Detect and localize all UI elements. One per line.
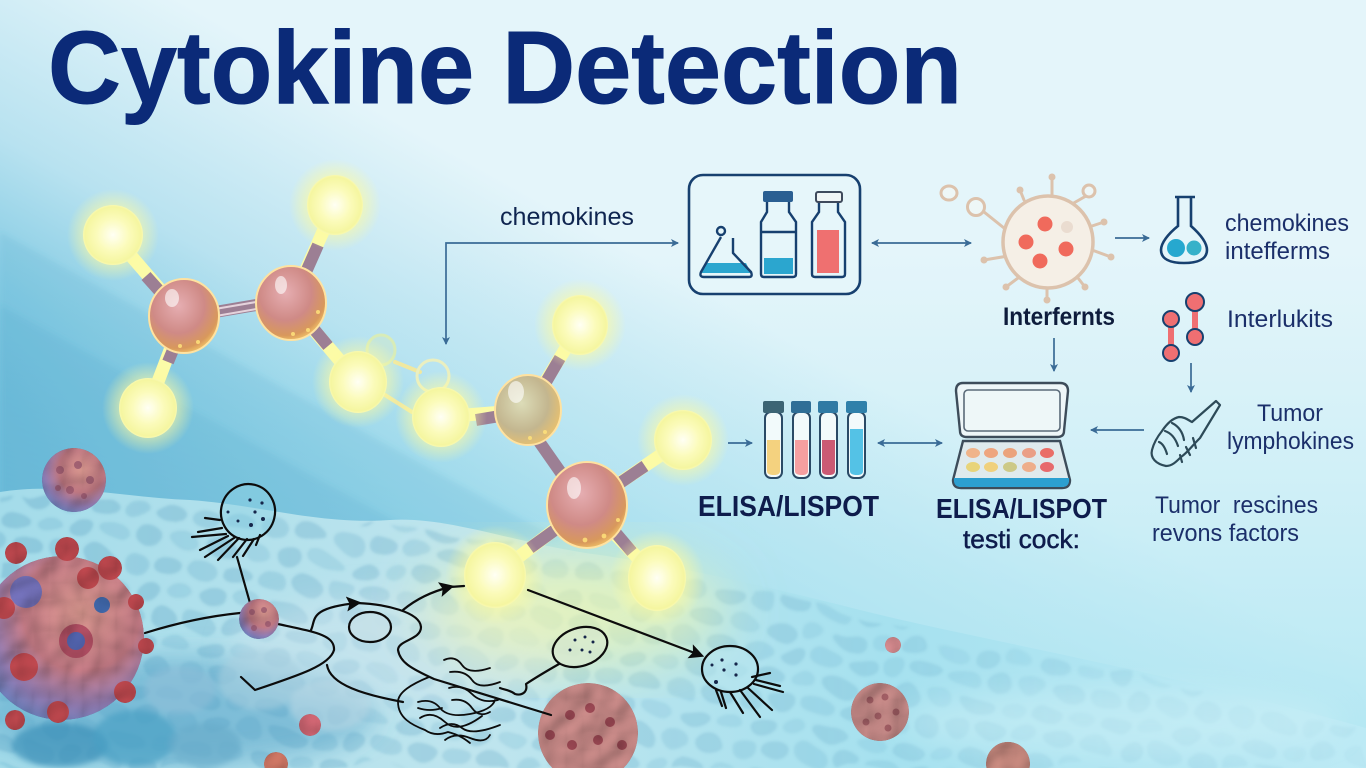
tiny floating particles [264,637,1030,768]
squiggle lines: fibroblast [398,658,500,743]
virus: large, left [0,537,154,730]
arrow: box to interferon cell [872,242,971,244]
label: Tumor lymphokines: Tumor [1257,400,1323,427]
label: ELISA/LISPOT test kit: testi cock: [963,524,1080,554]
black arrows: signalling network [145,557,700,715]
icon: flask [700,227,752,277]
icon: test kit case [953,383,1070,488]
terrain: cell tissue surface [0,489,1366,768]
arrow: tubes to kit [878,442,942,444]
icon: tall bottle [761,191,796,277]
label: chemokines interferms: chemokines [1225,210,1349,237]
label: chemokines with elbow arrow [446,203,678,344]
label: ELISA/LISPOT test kit [936,493,1107,554]
label: Interferents: Interfernts [1003,303,1115,331]
icon: red bottle [812,192,845,277]
pathway: hand-drawn cells and arrows [145,478,783,743]
arrow: lymph icon to kit [1091,429,1144,431]
arrow: dumbbell down to lymph icon [1190,363,1192,392]
icon: round flask [1161,197,1207,263]
panel: lab glassware box [689,175,860,294]
icon: test tubes [763,401,867,478]
label: chemokines interferms: intefferms [1225,238,1330,265]
icon: lymph gland sketch [1152,401,1220,466]
label: Interlukits: Interlukits [1227,306,1333,333]
icon: interferon cell [941,174,1114,304]
label: Tumor lymphokines [1227,400,1354,455]
label: Tumor rescines revons factors [1152,492,1318,547]
arrow: molecule to tubes [728,442,752,444]
sketch cell: bottom right [702,646,783,717]
label: chemokines with elbow arrow: chemokines [500,203,634,231]
molecule: glowing cytokine chain [67,159,729,665]
virus: small upper left [42,448,106,512]
node cell: right oval [500,620,613,695]
label: Tumor rescines revons factors: revons factors [1152,520,1299,547]
virus: bottom right [851,683,909,741]
label: ELISA/LISPOT test kit: ELISA/LISPOT [936,493,1107,524]
label: Tumor lymphokines: lymphokines [1227,428,1354,455]
sketch cell: top [192,478,281,560]
virus: pathway node [239,599,279,639]
label: ELISA/LISPOT left: ELISA/LISPOT [698,491,879,523]
virus: bottom center [538,683,638,768]
icon: red dumbbell molecule [1163,293,1204,361]
label: Tumor rescines revons factors: Tumor rescines [1155,492,1318,519]
title: Cytokine Detection [48,10,962,125]
label: chemokines interferms [1225,210,1349,265]
node cell: center [349,612,391,642]
arrow: cell to flask [1115,237,1149,239]
arrow: interferents down to kit [1053,338,1055,371]
